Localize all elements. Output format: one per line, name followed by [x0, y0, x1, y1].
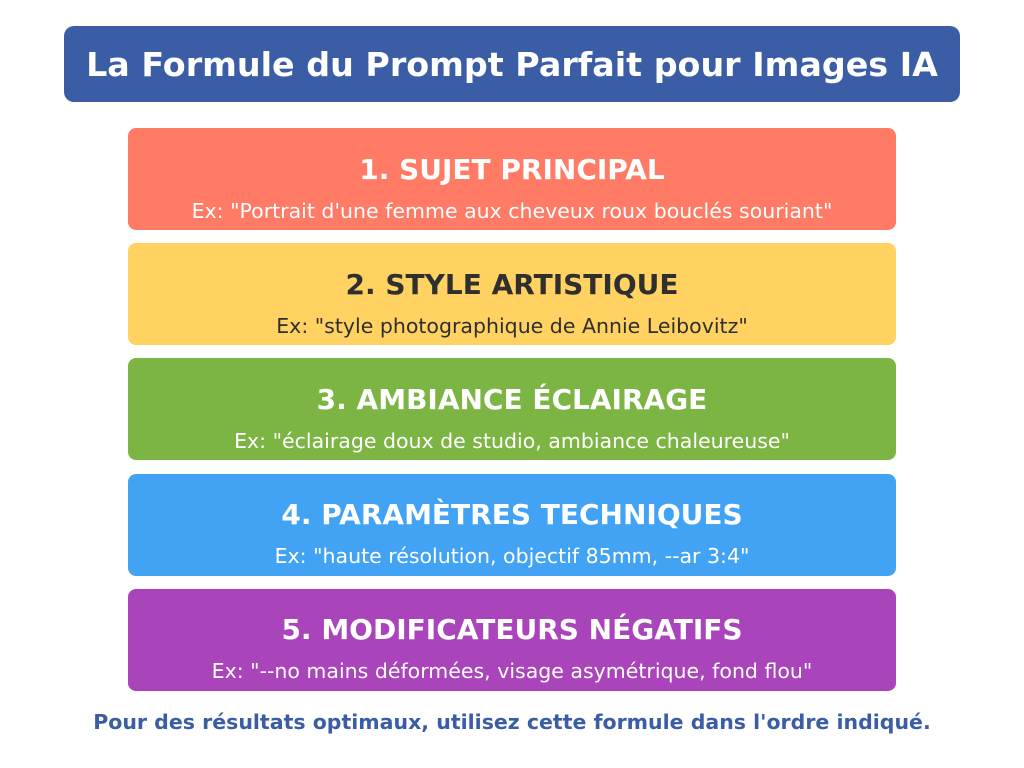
panel: 3. ambiance éclairage — [128, 358, 896, 460]
title — [64, 26, 960, 102]
example text: modificateurs négatifs: Ex: "--no mains déformées, visage asymétrique, fond flou" — [212, 659, 812, 683]
example text: ambiance éclairage: Ex: "éclairage doux de studio, ambiance chaleureuse" — [234, 429, 790, 453]
title: La Formule du Prompt Parfait pour Images IA — [86, 45, 938, 84]
heading: paramètres techniques: 4. PARAMÈTRES TECHNIQUES — [281, 498, 743, 531]
panel: 1. sujet principal — [128, 128, 896, 230]
heading: style artistique: 2. STYLE ARTISTIQUE — [346, 268, 678, 301]
example text: sujet principal: Ex: "Portrait d'une femme aux cheveux roux bouclés souriant" — [192, 199, 832, 223]
panel: 2. style artistique — [128, 243, 896, 345]
heading: ambiance éclairage: 3. AMBIANCE ÉCLAIRAGE — [317, 383, 707, 416]
footer note: Pour des résultats optimaux, utilisez cette formule dans l'ordre indiqué. — [93, 710, 931, 734]
panel: 5. modificateurs négatifs — [128, 589, 896, 691]
panel: 4. paramètres techniques — [128, 474, 896, 576]
heading: modificateurs négatifs: 5. MODIFICATEURS NÉGATIFS — [281, 613, 743, 646]
example text: style artistique: Ex: "style photographique de Annie Leibovitz" — [276, 314, 748, 338]
example text: paramètres techniques: Ex: "haute résolution, objectif 85mm, --ar 3:4" — [275, 544, 749, 568]
heading: sujet principal: 1. SUJET PRINCIPAL — [359, 153, 665, 186]
